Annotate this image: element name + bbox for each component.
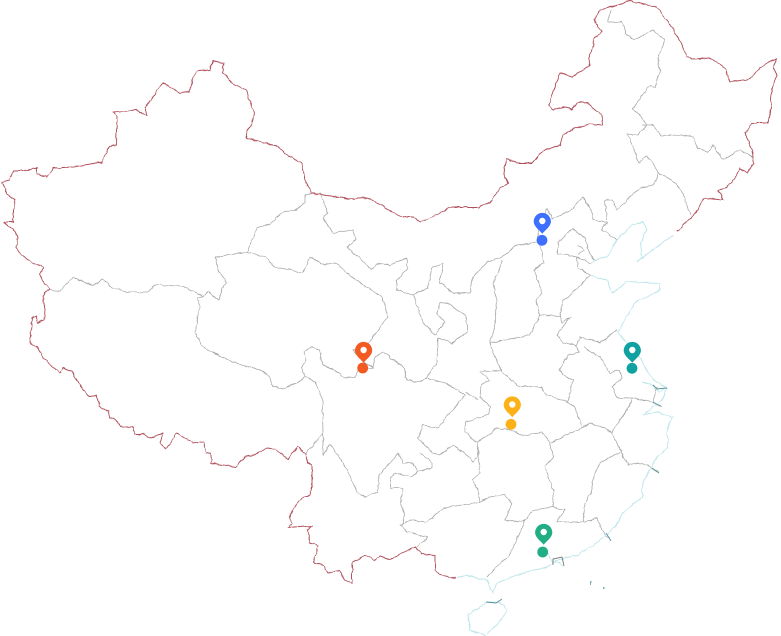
pin: teal bbox=[624, 342, 641, 374]
pin: blue bbox=[534, 213, 551, 246]
pin: green bbox=[535, 524, 552, 557]
pin: orange bbox=[355, 342, 372, 373]
pin: yellow bbox=[504, 396, 521, 430]
islands and harbour details bbox=[486, 385, 667, 603]
coastline bbox=[457, 222, 673, 635]
